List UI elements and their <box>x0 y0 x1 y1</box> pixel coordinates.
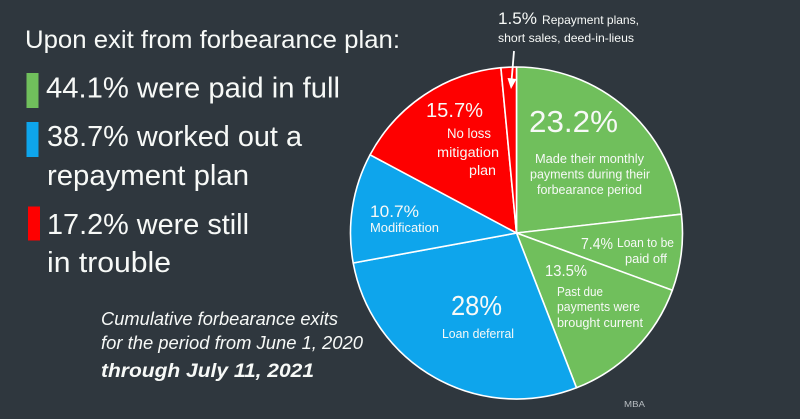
slice: loan deferral 28% <box>353 233 576 399</box>
label: 13.5%: payments were <box>557 300 640 314</box>
label: 23.2% <box>529 104 650 197</box>
slice: loan to be paid off 7.4% <box>516 214 682 290</box>
label: 23.2%: Made their monthly <box>535 152 645 166</box>
legend item: paid in full: 44.1% were paid in full <box>46 72 340 104</box>
arrow: to 1.5% slice <box>508 51 516 89</box>
slice: past due brought current 13.5% <box>516 233 672 388</box>
legend item: repayment plan: 38.7% worked out a <box>47 121 303 153</box>
label: 7.4%: 7.4% <box>581 236 613 253</box>
label: 7.4% <box>581 236 674 266</box>
title: Upon exit from forbearance plan: <box>25 26 400 54</box>
callout: 1.5% label: 1.5% <box>498 10 537 28</box>
label: 7.4%: paid off <box>625 252 668 266</box>
label: 15.7%: mitigation <box>437 145 499 160</box>
legend item: repayment plan: repayment plan <box>47 160 249 192</box>
label: 13.5% <box>545 263 644 330</box>
slice: no loss mitigation 15.7% <box>370 68 516 233</box>
source credit: MBA <box>624 400 646 409</box>
legend item: repayment plan <box>26 121 303 192</box>
slice: repayment plans etc 1.5% <box>501 67 516 233</box>
pie chart <box>350 67 682 399</box>
period note: for the period from June 1, 2020 <box>101 333 363 353</box>
label: 23.2%: 23.2% <box>529 104 618 139</box>
legend item: still in trouble <box>28 206 249 279</box>
label: 15.7%: No loss <box>447 126 491 141</box>
period note: Cumulative forbearance exits <box>101 309 338 329</box>
label: 23.2%: payments during their <box>530 168 650 182</box>
label: 13.5%: 13.5% <box>545 263 587 280</box>
label: 13.5%: brought current <box>557 316 644 330</box>
label: 13.5%: Past due <box>557 285 603 299</box>
label: 15.7%: 15.7% <box>426 99 483 122</box>
callout: 1.5% label: short sales, deed-in-lieus <box>498 31 634 45</box>
legend <box>26 72 340 279</box>
slice: modification 10.7% <box>350 155 516 263</box>
label: 15.7% <box>426 99 499 178</box>
label: 10.7% <box>370 202 439 235</box>
period note <box>101 309 363 382</box>
legend item: still in trouble: 17.2% were still <box>47 209 249 241</box>
label: 10.7%: 10.7% <box>370 202 419 221</box>
slice: made monthly payments 23.2% <box>516 67 681 233</box>
label: 10.7%: Modification <box>370 221 439 235</box>
label: 23.2%: forbearance period <box>537 183 642 197</box>
label: 15.7%: plan <box>469 163 496 178</box>
legend item: still in trouble: in trouble <box>47 247 171 279</box>
label: 7.4%: Loan to be <box>617 236 674 250</box>
label: 28% <box>442 290 514 341</box>
label: 28%: 28% <box>451 290 502 321</box>
period note: through July 11, 2021 <box>101 361 314 382</box>
label: 28%: Loan deferral <box>442 327 514 341</box>
callout: 1.5% label: Repayment plans, <box>542 13 639 27</box>
callout: 1.5% label <box>498 10 639 45</box>
